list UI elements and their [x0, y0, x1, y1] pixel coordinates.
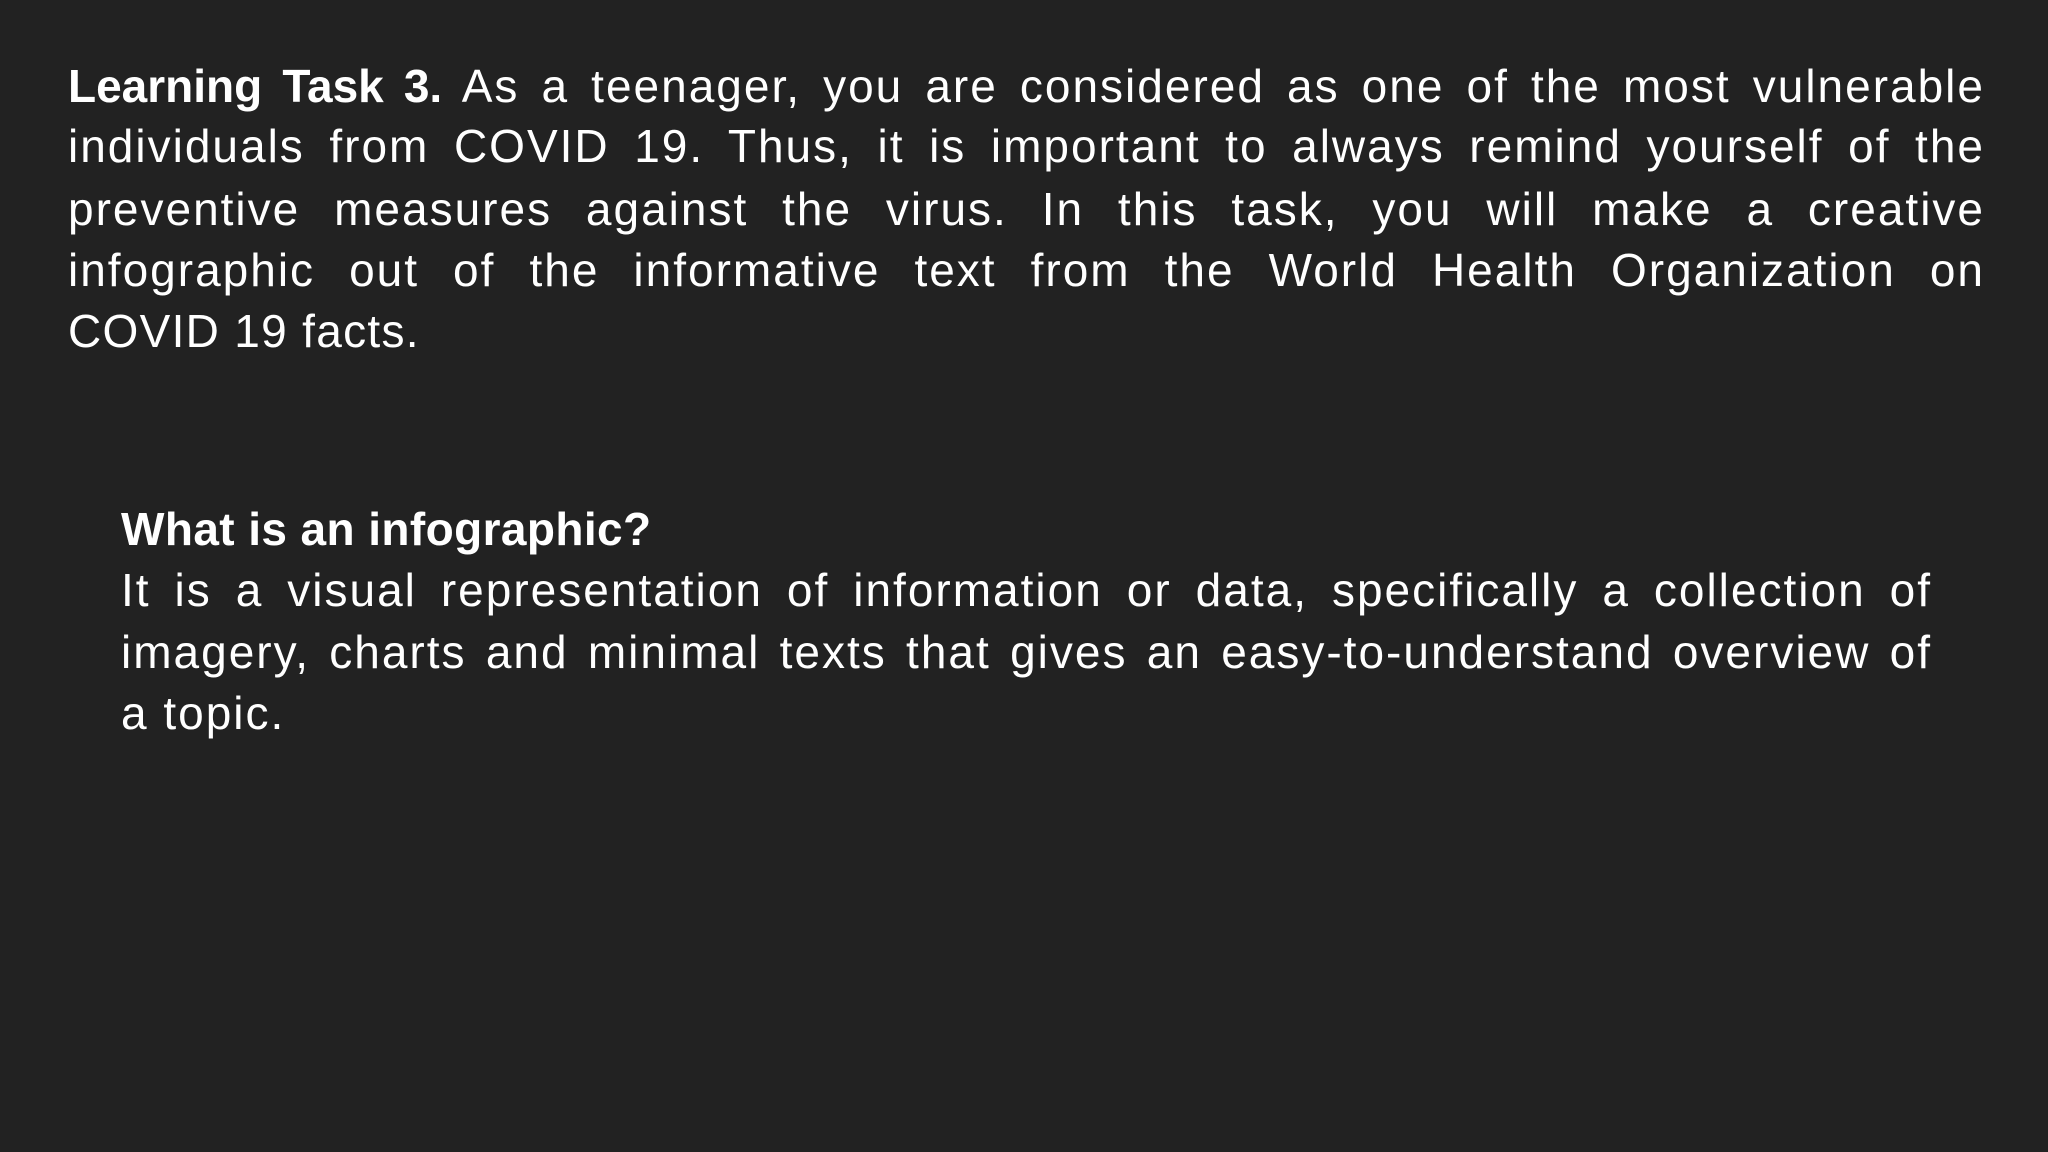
text block: learning task introduction: infographic out of the informative text from the World Health Organization on: [68, 244, 1985, 296]
heading: what is an infographic: What is an infographic?: [121, 503, 652, 555]
text block: infographic definition: It is a visual representation of information or data, specifically a collection of: [121, 564, 1932, 616]
text block: learning task introduction: individuals from COVID 19. Thus, it is important to always remind yourself of the: [68, 120, 1985, 172]
text block: infographic definition: imagery, charts and minimal texts that gives an easy-to-understand overview of: [121, 626, 1932, 678]
text block: infographic definition: a topic.: [121, 687, 285, 739]
text block: infographic definition: [121, 564, 1932, 739]
text block: learning task introduction: COVID 19 facts.: [68, 305, 420, 357]
text block: learning task introduction: Learning Task 3. As a teenager, you are considered as one of the most vulnerable: [68, 60, 1985, 112]
text block: learning task introduction: [68, 60, 1985, 357]
text block: learning task introduction: preventive measures against the virus. In this task, you will make a creative: [68, 183, 1985, 235]
